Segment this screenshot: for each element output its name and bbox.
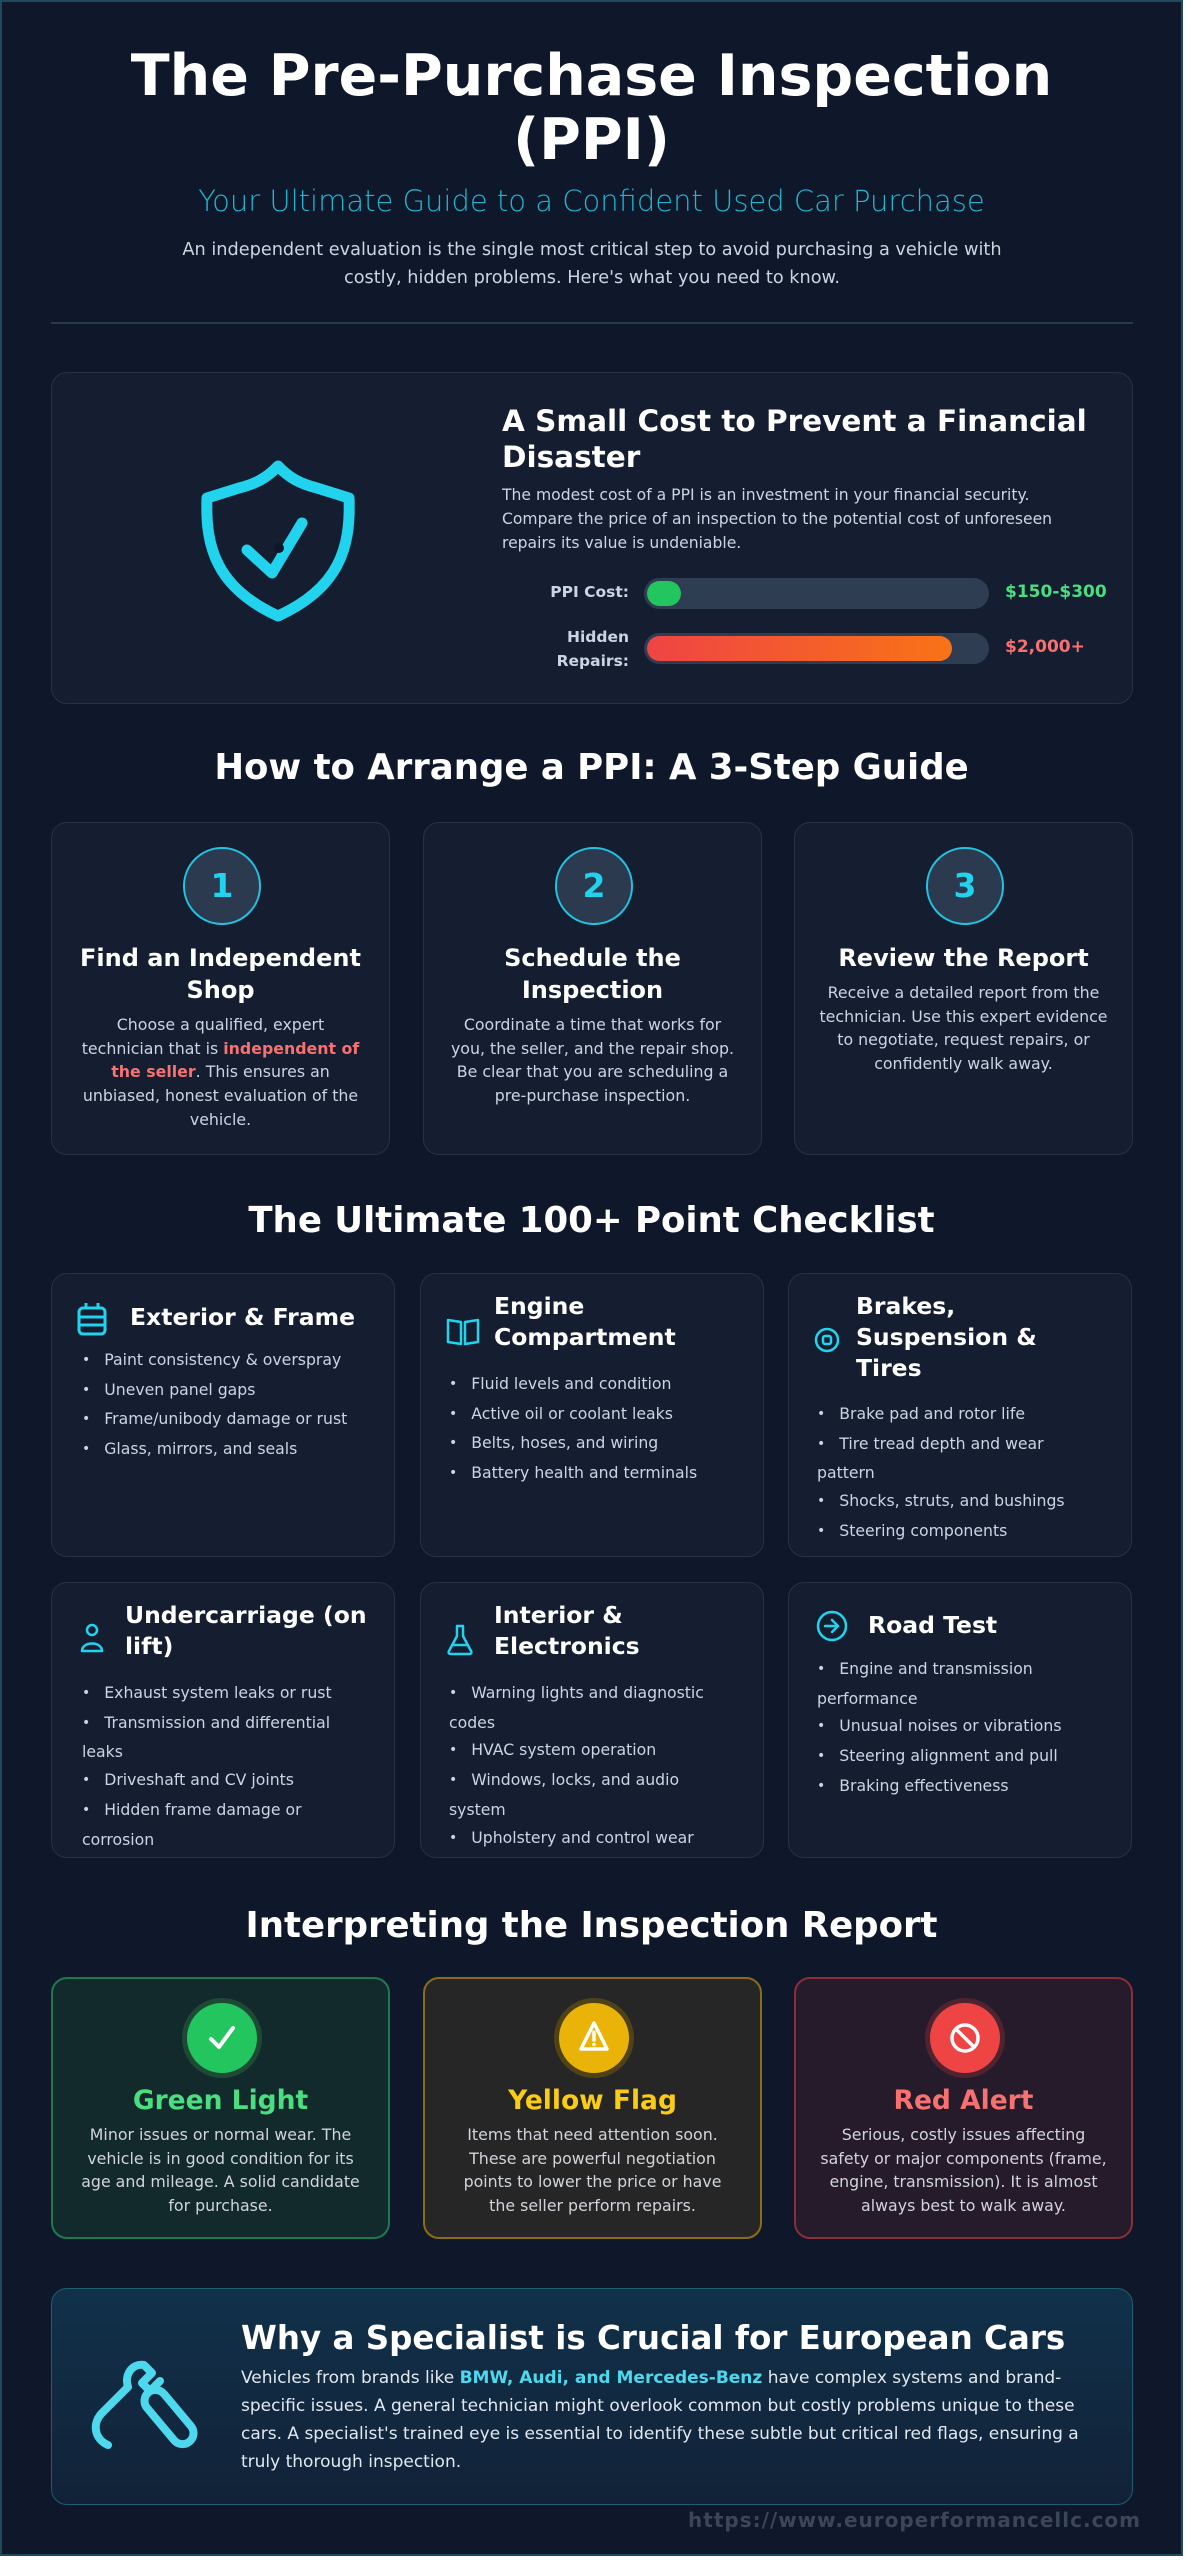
step 3: Review the Report bbox=[838, 944, 1089, 972]
report card: green: Green Light bbox=[133, 2085, 308, 2116]
report card: red: Serious, costly issues affecting safety or major components (frame, engine, transmission). It is almost always best to walk away. bbox=[820, 2125, 1107, 2215]
checklist: brakes bbox=[788, 1273, 1132, 1557]
bar chart: $150-$300 bbox=[1005, 582, 1107, 602]
checklist: engine: Belts, hoses, and wiring bbox=[471, 1433, 658, 1452]
checklist: engine: Compartment bbox=[494, 1323, 676, 1351]
icon: stop bbox=[930, 2003, 1000, 2073]
heading: A Small Cost to Prevent a Financial Disaster bbox=[502, 404, 1087, 474]
step 1: Choose a qualified, expert technician that is independent of the seller. This ensures an unbiased, honest evaluation of the vehicle. bbox=[82, 1015, 359, 1129]
checklist: road test bbox=[788, 1582, 1132, 1858]
heading: Why a Specialist is Crucial for European Cars bbox=[241, 2319, 1065, 2357]
step 3 bbox=[794, 822, 1133, 1155]
checklist: brakes: Brakes, bbox=[856, 1292, 955, 1320]
checklist: brakes: Steering components bbox=[839, 1521, 1007, 1540]
heading: interpreting: Interpreting the Inspection Report bbox=[246, 1905, 937, 1946]
text: Vehicles from brands like BMW, Audi, and Mercedes-Benz have complex systems and brand-specific issues. A general technician might overlook common but costly problems unique to these cars. A specialist's trained eye is essential to identify these subtle but critical red flags, ensuring a truly thorough inspection. bbox=[241, 2368, 1079, 2472]
checklist: engine: Active oil or coolant leaks bbox=[471, 1404, 673, 1423]
checklist: road test: Unusual noises or vibrations bbox=[839, 1716, 1062, 1735]
checklist: exterior bbox=[51, 1273, 395, 1557]
checklist: interior bbox=[420, 1582, 764, 1858]
heading: 3-step guide: How to Arrange a PPI: A 3-Step Guide bbox=[214, 747, 969, 788]
panel: specialist bbox=[51, 2288, 1133, 2505]
checklist: engine: Fluid levels and condition bbox=[471, 1374, 671, 1393]
intro text: An independent evaluation is the single most critical step to avoid purchasing a vehicle with costly, hidden problems. Here's what you need to know. bbox=[182, 240, 1002, 288]
report card: red bbox=[794, 1977, 1133, 2239]
checklist: undercarriage: Undercarriage (on lift) bbox=[125, 1601, 367, 1660]
icon: check bbox=[187, 2003, 257, 2073]
checklist: exterior: Exterior & Frame bbox=[130, 1303, 355, 1331]
checklist: engine: Engine bbox=[494, 1292, 584, 1320]
checklist: brakes: Tire tread depth and wear pattern bbox=[817, 1434, 1044, 1482]
checklist: brakes: Brake pad and rotor life bbox=[839, 1404, 1025, 1423]
checklist: brakes: Tires bbox=[856, 1354, 922, 1382]
checklist: interior: Electronics bbox=[494, 1632, 640, 1660]
report card: green: Minor issues or normal wear. The vehicle is in good condition for its age and mileage. A solid candidate for purchase. bbox=[81, 2125, 360, 2215]
heading: checklist: The Ultimate 100+ Point Checklist bbox=[248, 1200, 935, 1241]
step 1: Find an Independent Shop bbox=[80, 944, 361, 1004]
bar chart: PPI Cost: bbox=[550, 583, 629, 601]
checklist: engine bbox=[420, 1273, 764, 1557]
step 2: Schedule the Inspection bbox=[504, 944, 681, 1004]
checklist: interior: HVAC system operation bbox=[471, 1740, 656, 1759]
panel: cost comparison bbox=[51, 372, 1133, 704]
report card: yellow: Items that need attention soon. These are powerful negotiation points to lower the price or have the seller perform repairs. bbox=[464, 2125, 721, 2215]
checklist: engine: Battery health and terminals bbox=[471, 1463, 697, 1482]
report card: green bbox=[51, 1977, 390, 2239]
step 2: 2 bbox=[583, 866, 605, 905]
title bbox=[131, 43, 1052, 173]
bar chart: Hidden bbox=[567, 628, 629, 646]
step 3: 3 bbox=[954, 866, 976, 905]
subtitle: Your Ultimate Guide to a Confident Used Car Purchase bbox=[198, 184, 985, 218]
step 2 bbox=[423, 822, 762, 1155]
icon: wrench bbox=[92, 2360, 198, 2449]
checklist: exterior: Frame/unibody damage or rust bbox=[104, 1409, 347, 1428]
step 2: Coordinate a time that works for you, the seller, and the repair shop. Be clear that you are scheduling a pre-purchase inspection. bbox=[451, 1015, 734, 1105]
checklist: road test: Road Test bbox=[868, 1611, 997, 1639]
checklist: brakes: Shocks, struts, and bushings bbox=[839, 1491, 1065, 1510]
checklist: road test: Braking effectiveness bbox=[839, 1776, 1009, 1795]
footer url: https://www.europerformancellc.com bbox=[688, 2508, 1141, 2532]
step 1 bbox=[51, 822, 390, 1155]
checklist: undercarriage: Driveshaft and CV joints bbox=[104, 1770, 294, 1789]
checklist: interior: Upholstery and control wear bbox=[471, 1828, 694, 1847]
title: The Pre-Purchase Inspection bbox=[131, 43, 1052, 109]
report card: yellow: Yellow Flag bbox=[508, 2085, 677, 2116]
icon: shield bbox=[201, 460, 355, 622]
checklist: interior: Warning lights and diagnostic codes bbox=[449, 1683, 704, 1732]
checklist: undercarriage bbox=[51, 1582, 395, 1858]
paragraph: The modest cost of a PPI is an investment in your financial security. Compare the price of an inspection to the potential cost of unforeseen repairs its value is undeniable. bbox=[502, 486, 1052, 552]
checklist: road test: Engine and transmission performance bbox=[817, 1659, 1033, 1708]
report card: yellow bbox=[423, 1977, 762, 2239]
checklist: exterior: Paint consistency & overspray bbox=[104, 1350, 341, 1369]
checklist: road test: Steering alignment and pull bbox=[839, 1746, 1058, 1765]
checklist: exterior: Uneven panel gaps bbox=[104, 1380, 255, 1399]
checklist: brakes: Suspension & bbox=[856, 1323, 1037, 1351]
step 3: Receive a detailed report from the technician. Use this expert evidence to negotiate, request repairs, or confidently walk away. bbox=[819, 983, 1108, 1073]
checklist: exterior: Glass, mirrors, and seals bbox=[104, 1439, 297, 1458]
checklist: interior: Interior & bbox=[494, 1601, 623, 1629]
bar chart: $2,000+ bbox=[1005, 637, 1085, 657]
icon: warning bbox=[559, 2003, 629, 2073]
report card: red: Red Alert bbox=[894, 2085, 1033, 2116]
title: (PPI) bbox=[513, 107, 670, 173]
checklist: interior: Windows, locks, and audio system bbox=[449, 1770, 679, 1819]
checklist: undercarriage: Hidden frame damage or corrosion bbox=[82, 1800, 302, 1849]
bar chart bbox=[550, 578, 1107, 670]
checklist: undercarriage: Exhaust system leaks or rust bbox=[104, 1683, 332, 1702]
step 1: 1 bbox=[211, 866, 233, 905]
bar chart: Repairs: bbox=[557, 652, 629, 670]
checklist: undercarriage: Transmission and differential leaks bbox=[82, 1713, 330, 1761]
